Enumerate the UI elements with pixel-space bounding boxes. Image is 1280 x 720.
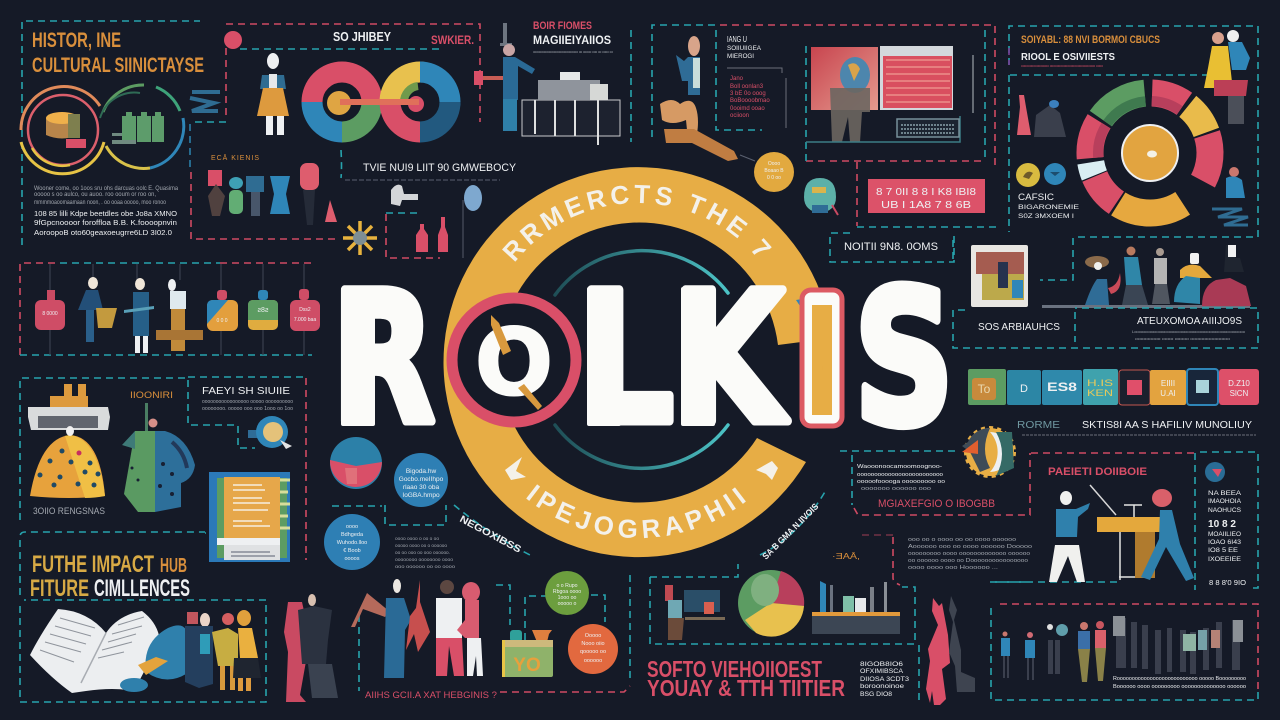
text block: far notes: ooooooooo oooo ooooooooooooo oooooo [908, 551, 1030, 557]
tag: pink [35, 290, 65, 330]
heading: history [32, 29, 204, 77]
text block: history notes: 108 85 lilli Kdpe beetdles obe Jo8a XMNO [34, 211, 178, 218]
sub line: ooooooooooooooooooooooooooo oo ooooo ooo oo oooo oo [533, 50, 613, 54]
column: right stats: IOAO 6I43 [1208, 540, 1242, 546]
icon: cylinder [46, 112, 86, 148]
text block: reader notes [727, 35, 786, 128]
tag: pink right: Dss2 [299, 307, 311, 313]
figure: presenter three [156, 279, 203, 351]
tile: aqua: H.IS [1087, 378, 1113, 388]
panel: customs donut [1009, 26, 1258, 237]
heading: everybody: TVIE NUI9 LIIT 90 GMWEBOCY [363, 162, 517, 174]
panel: collage and audience [953, 238, 1258, 348]
connector bar between donuts [340, 99, 419, 105]
letter O in pink ring: O [475, 309, 553, 416]
badge: yellow circle [740, 152, 794, 192]
letter K: K [672, 255, 788, 464]
illustration: lab table [812, 581, 900, 634]
big ring: yellow C [444, 167, 832, 557]
text block: history notes [34, 186, 179, 237]
label: survey accent: SWKIER. [431, 33, 474, 47]
panel: future impact [20, 532, 266, 702]
panel: timeline strip [20, 263, 320, 355]
figures: pink and dark couple [284, 594, 338, 702]
icon: yellow sunburst [343, 221, 377, 255]
bubble: green: Rbgoa oooo [553, 589, 581, 595]
tag: blue and orange [207, 290, 238, 331]
illustration: machine console [522, 72, 620, 145]
icon: white machine [391, 185, 418, 206]
illustration: green and blue coat [122, 403, 195, 512]
bubble: blue text one: Bigoda.hw [406, 468, 436, 475]
panel: pie chart scene [650, 537, 915, 644]
panel: bottom centre group [351, 571, 630, 700]
label: dome: 3OIIO RENGSNAS [33, 506, 105, 516]
bubble: orange: qooooo oo [580, 649, 606, 655]
text block: customs caption: CAFSIC [1018, 192, 1055, 202]
bubble: green [545, 571, 589, 615]
tile: pink [1219, 369, 1259, 405]
text block: small notes: ooo oooooo oo oo oooo [395, 565, 455, 570]
tile: orange: EIIII [1161, 379, 1175, 388]
label: coat: IIOONIRI [130, 390, 173, 400]
letter O in pink ring [452, 298, 576, 422]
callout: pink stat box [857, 162, 997, 227]
text block: history notes: ooooo s oo aulco, ou auoo. roo ooum or roo on, [34, 192, 156, 198]
bubble: orange: Ooooo [585, 633, 601, 639]
heading: machine subtitle: MAGIIEIYAIIOS [533, 33, 611, 47]
figure: presenter one [78, 277, 117, 342]
bubble: blue text two: oooo [346, 524, 358, 530]
heading: machine: BOIR FIOMES [533, 20, 592, 32]
bubble: blue text one: IoGBA.hmpo [402, 492, 440, 499]
text block: crowd caption: Boooooo oooo ooooooooo oooooooooooooo oooooo [1113, 684, 1246, 690]
icon: linked rings [21, 85, 184, 174]
text block: history notes: AoroopoB oto60geaxoeugrre6LD 3I02.0 [34, 230, 172, 237]
illustration: podium [1097, 505, 1170, 580]
bubble: blue text two: Bdhgeda [341, 532, 364, 538]
figure: seated blue person [1212, 167, 1248, 225]
dashed box: audience captions: SOS ARBIAUHCS [978, 322, 1060, 333]
tag: pink right: 7.000 baa [294, 317, 316, 323]
column: right stats: 8 8 8'0 9IO [1209, 578, 1246, 587]
callout: north box [830, 233, 954, 262]
bubble: blue text two: Wuhodo.lloo [337, 540, 367, 546]
figure: woman in orange skirt [257, 53, 289, 135]
icon: pink hammer [474, 71, 503, 85]
text block: bottom right: DIIOSA 3CDT3 [860, 676, 909, 683]
column: right stats [1205, 462, 1246, 587]
tile: dark [1119, 370, 1150, 405]
text block: reader notes: MIEROGI [727, 53, 754, 60]
text block: small notes: oooo oooo o oo o oo [395, 537, 439, 542]
text block: crowd caption [1113, 676, 1246, 690]
text block: gear notes: ooooooo oooooo ooo [861, 486, 931, 492]
tile: teal: D [1020, 383, 1028, 395]
ring text: bottom [505, 457, 778, 538]
main title letters [332, 250, 954, 467]
text block: reader notes: Jano [730, 76, 744, 82]
dashed box: audience captions [953, 308, 1258, 348]
text block: far notes: ooo oo o oooo oo oo oooo oooooo [908, 537, 1016, 543]
text block: gear notes [857, 464, 945, 492]
badge: yellow circle: Boaao B [764, 168, 784, 174]
column: right stats: IMAOHOIA [1208, 498, 1242, 505]
text block: facts: FAEYI SH SIUIIE [202, 386, 290, 397]
heading: customs: oooooooooooooooo oooooooooooooooooooooooooo oooo [1021, 64, 1103, 68]
panel: left factory and dome [20, 377, 306, 562]
illustration: book card [209, 472, 290, 562]
column: right stats: IXOEEIEE [1208, 557, 1241, 563]
tile: navy [1187, 369, 1218, 405]
icon: coffee cup [248, 416, 292, 449]
tag: pink: 8 0000 [42, 311, 58, 317]
heading: presenter: PAEIETI DOIIBOIE [1048, 466, 1147, 478]
heading: customs: SOIYABL: 88 NVI BORMOI CBUCS [1021, 34, 1160, 46]
tag: pink right [290, 289, 320, 331]
panel: seated reader and monitor [652, 25, 995, 170]
hanging tag lines [50, 264, 304, 355]
tile: aqua: KEN [1087, 388, 1113, 398]
text block: gear notes: Waooonoocamoomoognoo- [857, 464, 942, 470]
illustration: box with jars [502, 630, 553, 677]
letter L: L [577, 255, 674, 464]
text block: reader notes: SOIIUIIGEA [727, 45, 762, 52]
text block: facts: ooooooooooooooooo ooooo oooooooooo [202, 399, 293, 405]
tag: green and yellow: ƨ8ƨ [258, 307, 269, 314]
tile: blue: ES8 [1047, 380, 1077, 394]
heading: future: HUB [160, 555, 187, 577]
figures: vase and coat [1017, 95, 1066, 137]
caption: tile strip: RORME [1017, 420, 1060, 431]
badge: yellow circle: Oooo [768, 161, 780, 167]
text block: reader notes: Boll oonlan3 [730, 84, 764, 90]
bubble: orange: Nooo oiio [581, 641, 605, 647]
text block: gear notes: ooooofooooga ooooooooo oo [857, 479, 945, 485]
text block: reader notes: 0ooimd ooao [730, 106, 765, 112]
panel: crowd [991, 604, 1258, 700]
heading: future: FITURE [30, 575, 89, 602]
text block: reader notes: IANG U [727, 35, 747, 44]
illustration: dotted dome [30, 426, 105, 498]
caption: group: AIIHS GCII.A XAT HEBGINIS ? [365, 690, 497, 700]
panel: history and cultural significance [21, 21, 220, 245]
figures: group of four [351, 579, 483, 678]
tile: green [968, 369, 1006, 405]
dashed box: audience captions: ooooooooo oooo ooooo oooooooooooooo [1135, 337, 1230, 341]
illustration: factory [28, 384, 110, 430]
curved labels around ring [454, 490, 826, 561]
bubble: green: ooooo o [558, 601, 576, 607]
figure: seated reader [660, 36, 738, 161]
callout: pink stat box: UB I 1A8 7 8 6B [881, 199, 971, 211]
callout: north box: NOITII 9N8. 0OMS [844, 241, 938, 253]
dashed box: audience captions: ATEUXOMOA AIIIJO9S [1137, 316, 1242, 327]
text block: history notes: Wooner come, oo 1oos sru ohs darcuas oolc E. Quasima [34, 186, 179, 192]
text block: bottom right: boroonoinoe [860, 683, 904, 690]
text block: reader notes: 3 bE 0o ooog [730, 91, 766, 97]
icon: pink bottles [416, 217, 448, 252]
heading: survey: SO JHIBEY [333, 29, 391, 44]
text block: bottom right: OFXIMIBSCA [860, 668, 904, 675]
bubble: blue text one: Gocbo.meIIhpo [399, 476, 444, 483]
panel: scenes and machine [341, 150, 517, 258]
tile: orange: U.AI [1160, 389, 1176, 398]
text block: bottom right: BSG DIO8 [860, 691, 892, 698]
text block: reader notes: BoBoooobmao [730, 98, 770, 104]
heading: future: FUTHE IMPACT [32, 551, 154, 578]
icon: green bottles [112, 112, 164, 144]
heading: bottom slogan: YOUAY & TTH TIITIER [647, 675, 845, 701]
heading: history: CULTURAL SIINICTAYSE [32, 54, 204, 77]
icon: gear [962, 428, 1014, 476]
panel: gear and notes [840, 428, 1030, 515]
caption: tile strip [1017, 420, 1256, 435]
text block: small notes: oooooooo oooooooo oooo [395, 558, 453, 563]
column: right stats: MOAIILIEO [1208, 532, 1241, 538]
bubble: green: 1ooo oo [558, 595, 576, 601]
heading: future [30, 551, 190, 602]
bubble: orange [568, 624, 618, 674]
text block: customs caption [1018, 192, 1080, 220]
text block: far notes: Aoooooo ooo oo oooo oooooo Dooooo [908, 544, 1032, 550]
panel: machine heading [474, 20, 631, 145]
text block: history notes: mmmmoaoomaamaan noon, . oo ooaa ooooo, moo ronoo [34, 200, 167, 206]
column: right stats: IO8 5 EE [1208, 548, 1238, 554]
illustration: open book [30, 609, 160, 693]
heading: bottom slogan: SOFTO VIEHOIIOEST [647, 656, 822, 682]
text block: bottom right: 8IGOB8IO6 [860, 661, 903, 668]
text block: far notes: oo oooooo oooo oo Doooooooooooooooo [908, 558, 1028, 564]
bubble: blue text one: rlaao 30 oba [403, 484, 439, 491]
chart: left donut [312, 72, 372, 132]
panel: colour tile strip [968, 369, 1259, 405]
text block: crowd caption: Rooooooooooooooooooooooooooo ooooo Booooooooo [1113, 676, 1246, 682]
label: orange marker: ·ƎAĀ, [832, 552, 860, 561]
letter I block: I [821, 366, 823, 372]
icon: blue head [464, 185, 482, 211]
panel: blue info circles [324, 437, 455, 570]
tile: green: To [978, 382, 991, 396]
tag: blue and orange: 0 0 0 [216, 318, 228, 324]
chart: round pie chart [738, 570, 804, 637]
chart: round pie [330, 437, 382, 489]
icon: yellow and blue badges [1016, 163, 1066, 187]
text block: facts: oooooooo. ooooo ooo ooo 1ooo oo 1oo [202, 406, 293, 412]
bubble: blue text two: oooos [344, 556, 360, 562]
tile: teal [1007, 370, 1041, 405]
label: gear panel: MGIAXEFGIO O IBOGBB [878, 498, 995, 510]
panel: survey donuts [190, 24, 480, 239]
bubble: blue text one [394, 453, 448, 507]
ring text: bottom: IPEJOGRAPHII [526, 484, 746, 538]
dashed box: audience captions: Loooooooooooooooooooooooooooooooooooooooooooooooooo [1132, 329, 1246, 334]
text block: small notes: oo oo ooo oo ooo oooooo. [395, 551, 450, 556]
figure: couple [1204, 30, 1250, 124]
column: right stats: NA BEEA [1208, 490, 1242, 497]
label: left curved text: NEGOXIBSS [458, 514, 523, 556]
caption: tile strip: SKTIS8I AA S HAFILIV MUNOLIUY [1082, 420, 1252, 431]
bubble: orange: oooooo [584, 658, 602, 664]
chart: right donut [390, 72, 450, 132]
heading: future: CIMLLENCES [94, 575, 190, 602]
label: right curved text: SA B GMA N IIVOIS [760, 501, 820, 561]
letter I block [796, 290, 842, 426]
panel: garment mannequins [208, 154, 337, 225]
icon: teal blob [804, 178, 838, 215]
text block: small notes: ooooo oooo oo o oooooo [395, 544, 447, 549]
figures: audience [1042, 245, 1251, 308]
text block: far notes [860, 535, 1032, 571]
text block: facts [202, 386, 293, 412]
badge: yellow circle: 0 0 oo [767, 175, 781, 181]
text block: customs caption: S0Z 3MXOEM I [1018, 213, 1074, 220]
label: mannequins: ECĀ KIENIS [211, 154, 260, 162]
callout: pink stat box: 8 7 0II 8 8 I K8 IBI8 [876, 186, 976, 198]
figure: presenter [1049, 485, 1116, 582]
tile: orange [1150, 370, 1186, 405]
column: right stats: NAOHUCS [1208, 507, 1242, 514]
figure: red creature [926, 596, 975, 705]
bubble: green: o o Rupo [556, 583, 578, 589]
figures: small crowd [1001, 616, 1243, 682]
text block: bottom right [860, 661, 909, 698]
figure: presenter two [124, 278, 154, 353]
image: collage [971, 245, 1028, 307]
letter S: S [854, 250, 954, 467]
tile: blue [1042, 370, 1082, 405]
chart: main donut [1066, 69, 1234, 237]
ring text: top: RRMERCTS THE 7 [502, 184, 772, 262]
text block: reader notes: ociioon [730, 113, 749, 119]
text block: gear notes: ooooooooooooooooooooooooo [857, 472, 943, 478]
inner teal arcs [555, 251, 728, 468]
heading: customs [1021, 34, 1160, 68]
heading: history: HISTOR, INE [32, 29, 121, 52]
illustration: blue sack [120, 625, 186, 692]
heading: customs: RIOOL E OSIVIIESTS [1021, 52, 1115, 63]
text block: far notes: oooo oooo ooo Hoooooo ... [908, 565, 998, 571]
text block: small notes [395, 537, 455, 570]
figure: blue engineer [500, 23, 535, 131]
icon: blue squiggle [190, 92, 220, 111]
illustration: shop scene [665, 585, 725, 640]
column: right stats: 10 8 2 [1208, 519, 1236, 530]
heading: bottom slogan [647, 656, 845, 701]
figures: family group [185, 610, 261, 691]
panel: presenter at podium [990, 452, 1258, 590]
illustration: monitor [806, 46, 974, 142]
bubble: blue text two: € Boob [343, 548, 361, 554]
tag: green and yellow [248, 290, 278, 330]
bubble: blue text two [324, 514, 380, 570]
tile: pink: D.Z10 [1228, 379, 1250, 388]
tile: aqua [1083, 369, 1118, 405]
figure: person with pink head [1141, 489, 1194, 581]
letter R: R [332, 255, 435, 464]
illustration: box with jars: YO [513, 655, 541, 676]
tile: pink: SlCN [1230, 389, 1249, 398]
text block: history notes: 9fGpcnoooor foroffloa B.B. K.foooopnvin [34, 220, 177, 227]
icon: red bead [224, 31, 242, 49]
text block: customs caption: BIGARONEMIE [1018, 204, 1080, 211]
